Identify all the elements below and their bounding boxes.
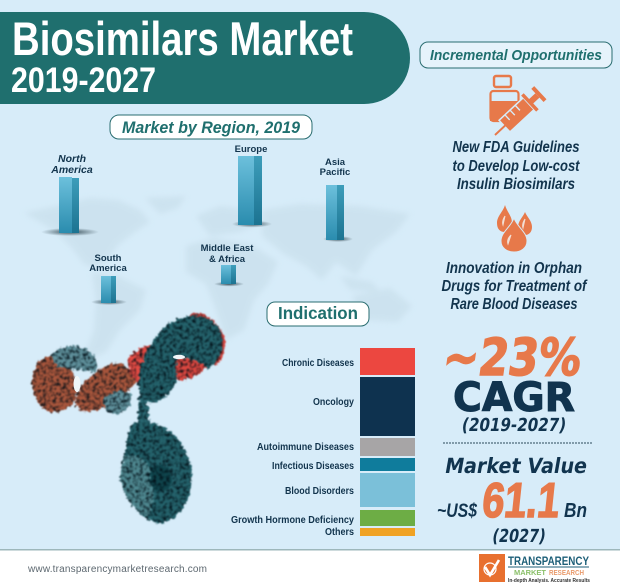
bar: Europe — [232, 144, 272, 228]
logo: transparency market research: RESEARCH — [549, 570, 584, 577]
bar: North America — [41, 153, 99, 236]
bar: Middle East and Africa — [201, 243, 254, 286]
bar: Asia Pacific — [320, 157, 353, 242]
segment: blood disorders — [285, 473, 415, 507]
logo: transparency market research: MARKET — [514, 570, 547, 577]
segment: growth hormone deficiency — [231, 510, 415, 526]
text: orphan drugs — [442, 260, 588, 313]
segment: infectious diseases: Infectious Diseases — [272, 461, 354, 472]
white gap in fab — [74, 376, 80, 392]
logo: transparency market research: In-depth Analysis. Accurate Results — [508, 578, 590, 584]
segment: oncology — [313, 377, 415, 436]
icon: blood drops — [497, 205, 532, 252]
text: orphan drugs: Rare Blood Diseases — [450, 296, 578, 313]
segment: others: Others — [325, 527, 354, 538]
segment: growth hormone deficiency: Growth Hormone Deficiency — [231, 515, 354, 526]
segment: oncology: Oncology — [313, 397, 354, 408]
text: FDA guidelines: New FDA Guidelines — [452, 139, 580, 156]
bar: South America: South — [95, 253, 122, 264]
title text: Biosimilars Market — [12, 12, 353, 65]
footer — [0, 549, 620, 587]
stacked bar legend: indication — [231, 348, 415, 538]
website url: www.transparencymarketresearch.com — [27, 564, 207, 575]
bar: Asia Pacific: Pacific — [320, 167, 350, 178]
bar: Europe: Europe — [235, 144, 267, 155]
bar: North America: America — [50, 164, 93, 176]
subtitle years: 2019-2027 — [11, 61, 156, 100]
stat: market value: Bn — [564, 500, 587, 522]
heading pill: incremental opportunities: Incremental Opportunities — [430, 48, 602, 64]
heading pill: indication: Indication — [278, 303, 358, 323]
bar: South America — [89, 253, 127, 305]
stat: market value: ~US$ — [437, 501, 477, 522]
stat: market value: Market Value — [443, 453, 589, 478]
icon: vial and syringe — [487, 76, 548, 143]
segment: others — [325, 527, 415, 538]
title banner — [0, 12, 410, 104]
bar chart: market by region — [41, 144, 353, 305]
text: orphan drugs: Innovation in Orphan — [446, 260, 582, 277]
heading pill: market by region: Market by Region, 2019 — [122, 119, 301, 137]
stat: CAGR — [439, 328, 586, 436]
segment: chronic diseases — [282, 348, 415, 375]
stat: market value: 61.1 — [480, 474, 563, 528]
heading pill: incremental opportunities — [420, 42, 612, 68]
segment: infectious diseases — [272, 458, 415, 472]
heading pill: indication — [267, 302, 369, 326]
stat: market value: (2027) — [491, 526, 547, 547]
antibody illustration — [34, 316, 222, 521]
logo: transparency market research — [479, 554, 590, 584]
text: FDA guidelines: to Develop Low-cost — [452, 158, 580, 175]
bar: Middle East and Africa: & Africa — [209, 254, 246, 265]
stat: CAGR: CAGR — [453, 375, 575, 421]
world map — [24, 196, 412, 362]
bar: Asia Pacific: Asia — [325, 157, 346, 168]
text: orphan drugs: Drugs for Treatment of — [442, 278, 588, 295]
heading pill: market by region — [110, 115, 312, 139]
text: FDA guidelines: Insulin Biosimilars — [457, 176, 575, 193]
segment: chronic diseases: Chronic Diseases — [282, 358, 354, 369]
stat: CAGR: (2019-2027) — [460, 415, 568, 436]
text: FDA guidelines — [452, 139, 580, 193]
segment: autoimmune diseases: Autoimmune Diseases — [257, 442, 354, 453]
bar: North America: North — [58, 153, 86, 165]
stat: CAGR: ~23% — [439, 328, 586, 388]
segment: blood disorders: Blood Disorders — [285, 486, 354, 497]
logo: transparency market research: TRANSPARENCY — [508, 554, 589, 568]
bar: South America: America — [89, 263, 127, 274]
segment: autoimmune diseases — [257, 438, 415, 456]
stat: market value — [437, 453, 589, 547]
bar: Middle East and Africa: Middle East — [201, 243, 254, 254]
